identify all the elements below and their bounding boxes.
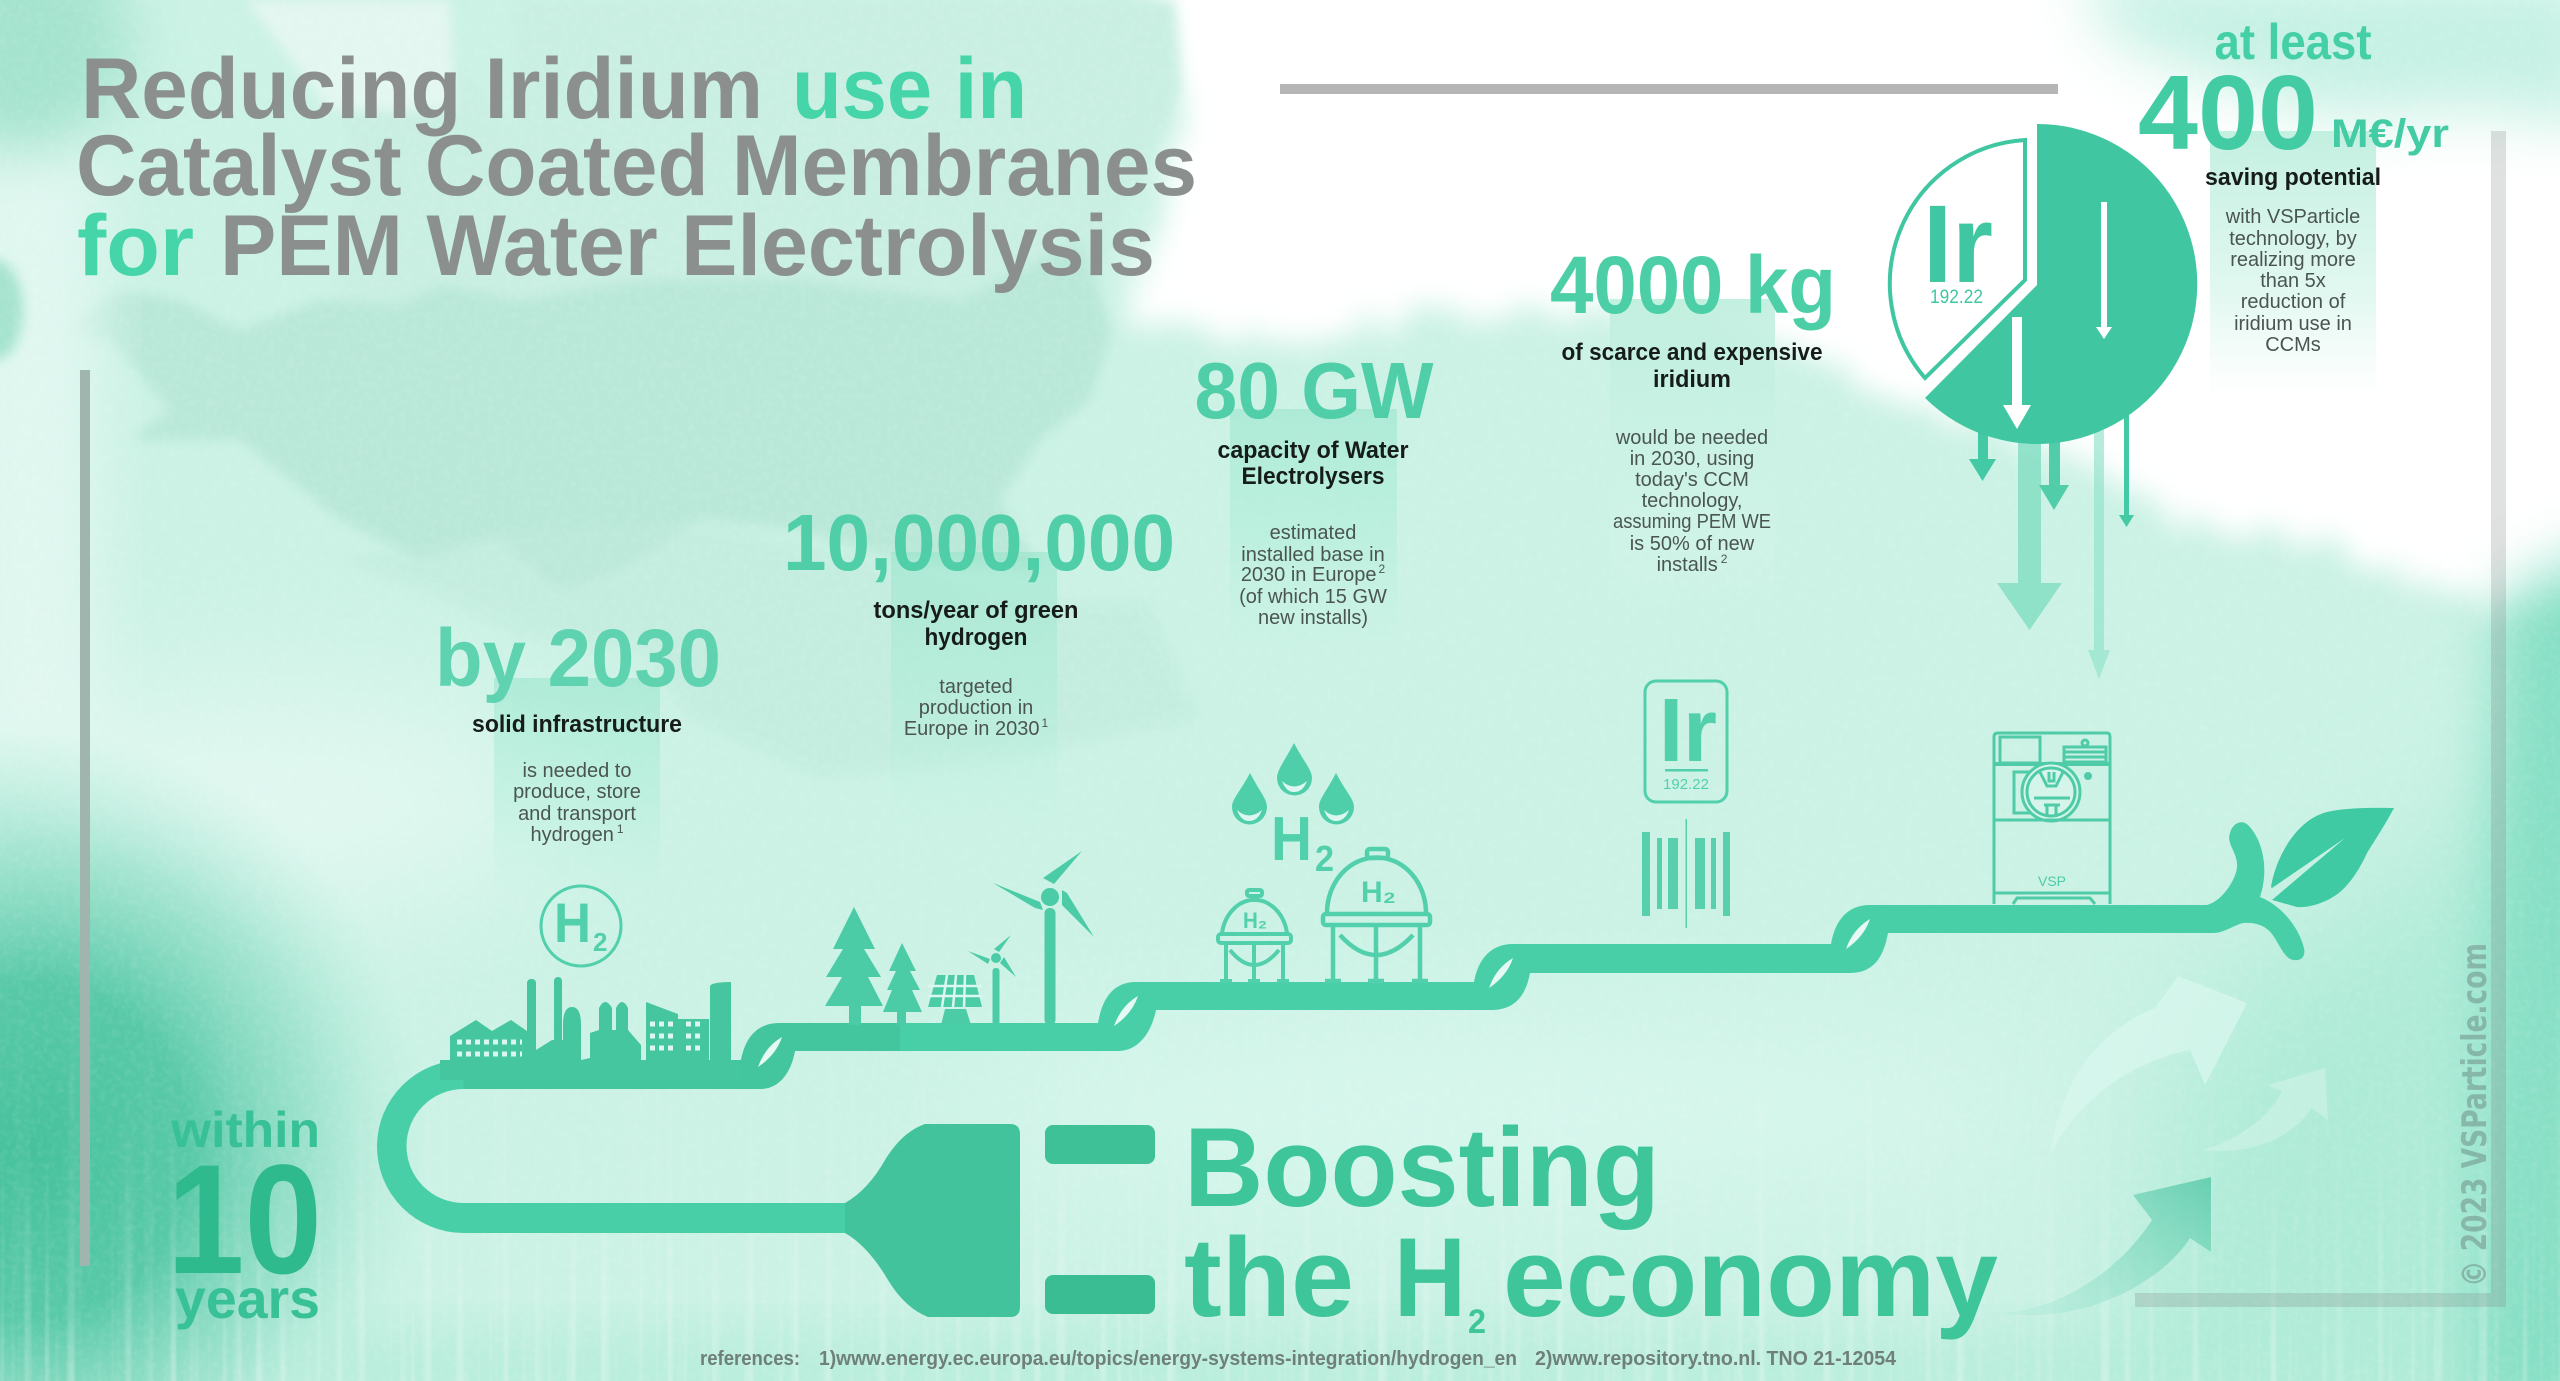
arrow: medium green — [2039, 430, 2069, 510]
heading: Boosting the H2 economy — [1184, 1105, 1998, 1341]
title: use in — [792, 41, 1027, 137]
wind turbine large — [993, 851, 1094, 1025]
stat: 4000 kg: 4000 kg — [1550, 240, 1836, 331]
background: vertical tree trunk streaks — [0, 1098, 2560, 1381]
icon: VSP machine — [1994, 733, 2110, 904]
body text: VSParticle saving: CCMs — [2265, 334, 2321, 356]
body text: installed base: installed base in — [1241, 544, 1385, 566]
body text: targeted production: production in — [919, 697, 1033, 719]
arrow: thin faded — [2088, 430, 2110, 679]
icon: small hydrogen tank: H₂ — [1243, 908, 1267, 933]
body text: installed base: 2 — [1378, 562, 1385, 576]
body text: installed base: new installs) — [1258, 607, 1368, 629]
body text: iridium need: is 50% of new — [1630, 533, 1755, 555]
icon: VSP machine: VSP — [2038, 873, 2066, 889]
body text: VSParticle saving — [2225, 206, 2360, 356]
background: Europe map body — [60, 240, 1112, 590]
text: within 10 years: within — [170, 1102, 320, 1158]
icon: iridium element card: Ir — [1659, 681, 1717, 781]
background: left mid blob — [0, 260, 23, 360]
arrow: faint upward large — [2051, 976, 2247, 1153]
subheading: tons per year — [874, 597, 1078, 651]
body text: VSParticle saving: with VSParticle — [2225, 206, 2360, 228]
pie: Ir symbol: Ir — [1923, 183, 1993, 306]
body text: VSParticle saving: iridium use in — [2234, 313, 2352, 335]
solar panel — [928, 975, 982, 1025]
body text: iridium need: in 2030, using — [1630, 448, 1754, 470]
body text: by 2030: produce, store — [513, 781, 641, 803]
H2 pipeline and plug — [377, 808, 2394, 1317]
frame bar: left — [80, 370, 90, 1266]
subheading: capacity — [1218, 437, 1408, 490]
pie chart: iridium reduction — [1890, 124, 2197, 444]
background: white sky upper right — [1120, 0, 2560, 610]
text: within 10 years — [167, 1102, 322, 1330]
body text: targeted production: Europe in 2030 — [904, 718, 1039, 740]
subheading: scarce iridium: of scarce and expensive — [1562, 339, 1822, 366]
pie: atomic mass: 192.22 — [1930, 287, 1983, 308]
leaf — [2271, 808, 2394, 907]
arrow: faint upward small — [2202, 1068, 2328, 1151]
title: Reducing Iridium — [81, 41, 763, 137]
arrow: large faded — [1997, 430, 2062, 630]
pie: filled saved share — [1925, 124, 2197, 444]
background: bright centre below the pipeline — [940, 1030, 2060, 1190]
heading: Boosting the H2 economy: Boosting — [1184, 1105, 1660, 1230]
icon: iridium element card: 192.22 — [1663, 776, 1709, 793]
subheading: tons per year: hydrogen — [924, 624, 1028, 651]
body text: VSParticle saving: reduction of — [2241, 291, 2346, 313]
background: pale lower-mid haze — [0, 690, 560, 910]
title: for — [77, 198, 194, 294]
wind turbine small — [968, 935, 1016, 1025]
heading: Boosting the H2 economy: the — [1184, 1215, 1354, 1340]
panel: 80 GW — [1194, 346, 1434, 654]
background: top-left wash — [0, 0, 130, 150]
arrow: short green — [1969, 430, 1996, 481]
plug body — [845, 1124, 1020, 1317]
subheading: capacity: Electrolysers — [1242, 463, 1384, 490]
stat: at least: at least — [2214, 14, 2372, 70]
body text: installed base — [1239, 522, 1387, 629]
city: windows — [457, 1024, 704, 1054]
background: Scandinavia wash — [245, 0, 1180, 320]
title: PEM Water Electrolysis — [220, 198, 1155, 294]
title — [76, 41, 1197, 294]
icon: large hydrogen tank: H₂ — [1361, 876, 1396, 909]
title: Catalyst Coated Membranes — [76, 118, 1197, 214]
body text: VSParticle saving: realizing more — [2230, 249, 2356, 271]
icon: big H2 label: 2 — [1315, 838, 1334, 879]
body text: iridium need: would be needed — [1615, 427, 1768, 449]
background: light wash top strip — [245, 0, 455, 110]
arrow: white long — [2096, 202, 2112, 339]
plug prong: bottom — [1045, 1275, 1155, 1314]
body text: targeted production: 1 — [1041, 716, 1048, 730]
stat: 400: 400 — [2138, 54, 2318, 172]
stat: by 2030: by 2030 — [435, 613, 721, 704]
icon: H2 circle — [541, 886, 621, 966]
heading: Boosting the H2 economy: economy — [1503, 1215, 1998, 1340]
body text: by 2030: 1 — [617, 822, 624, 836]
plug prong: top — [1045, 1125, 1155, 1164]
background: far right foliage strip — [2470, 540, 2560, 1381]
body text: by 2030: hydrogen — [530, 824, 614, 846]
pipeline: darker first tier — [464, 1023, 900, 1089]
background: lower map Balkans — [340, 520, 1200, 780]
background: dark forest lower left — [0, 720, 440, 1381]
body text: iridium need: technology, — [1642, 490, 1742, 512]
icon: city skyline and industry — [440, 977, 740, 1080]
body text: iridium need: today's CCM — [1635, 469, 1749, 491]
stat: 80 GW: 80 GW — [1194, 346, 1434, 435]
body text: installed base: estimated — [1270, 522, 1356, 544]
arrow: thin green — [2119, 410, 2134, 527]
subheading: capacity: capacity of Water — [1218, 437, 1408, 464]
references: 1)www.energy.ec.europa.eu/topics/energy-systems-integration/hydrogen_en — [819, 1348, 1517, 1370]
subheading: saving potential: saving potential — [2205, 164, 2381, 191]
frame bar: bottom — [2135, 1293, 2491, 1307]
text: within 10 years: 10 — [167, 1133, 322, 1307]
body text: iridium need: assuming PEM WE — [1613, 511, 1771, 533]
watermark: copyright: © 2023 VSParticle.com — [2455, 943, 2495, 1287]
icon: spectrum barcode — [1642, 819, 1730, 928]
subheading: tons per year: tons/year of green — [874, 597, 1078, 624]
body text: targeted production — [904, 676, 1048, 740]
heading: Boosting the H2 economy: H — [1394, 1215, 1466, 1340]
frame bar: top — [1280, 84, 2058, 94]
subheading: solid infrastructure: solid infrastructure — [472, 711, 682, 738]
body text: VSParticle saving: than 5x — [2260, 270, 2326, 292]
pipeline body with twists and root — [377, 822, 2304, 1233]
panel: by 2030 — [435, 613, 721, 900]
arrows below the pie — [1969, 410, 2134, 679]
pie: outlined remaining share — [1890, 140, 2025, 378]
stat: 10,000,000: 10,000,000 — [783, 498, 1175, 587]
arrow: green upward — [2002, 1177, 2211, 1315]
background: right lower darker — [2100, 750, 2560, 1381]
references: references: — [700, 1348, 800, 1370]
heading: Boosting the H2 economy: 2 — [1468, 1303, 1486, 1341]
icon: iridium element card — [1645, 681, 1727, 802]
body text: installed base: (of which 15 GW — [1239, 586, 1387, 608]
body text: iridium need: 2 — [1721, 552, 1728, 566]
body text: iridium need: installs — [1657, 554, 1718, 576]
frame bar: right — [2491, 131, 2506, 1307]
icon: big H2 label — [1271, 805, 1334, 879]
icon: big H2 label: H — [1271, 805, 1312, 874]
body text: iridium need — [1613, 427, 1771, 576]
body text: installed base: 2030 in Europe — [1241, 564, 1376, 586]
panel: saving potential — [2138, 14, 2449, 401]
icon: forest and renewable energy — [825, 851, 1094, 1025]
body text: by 2030: is needed to — [523, 760, 631, 782]
subheading: scarce iridium: iridium — [1653, 366, 1731, 393]
arrow: white thick — [2003, 317, 2031, 429]
panel: 10,000,000 tons — [783, 498, 1175, 832]
background: left pale column — [0, 120, 100, 760]
body text: by 2030 — [513, 760, 641, 846]
tree small — [883, 943, 922, 1025]
subheading: scarce iridium — [1562, 339, 1822, 393]
background: top-right cloud — [2080, 0, 2560, 130]
icon: H2 circle: H — [554, 891, 591, 954]
tree large — [825, 907, 883, 1025]
background: bottom band — [300, 1330, 2500, 1381]
icon: H2 circle: 2 — [593, 927, 607, 957]
icon: large hydrogen tank — [1323, 849, 1430, 981]
body text: targeted production: targeted — [939, 676, 1013, 698]
pipeline: twist slits — [758, 919, 1870, 1067]
references: 2)www.repository.tno.nl. TNO 21-12054 — [1535, 1348, 1897, 1370]
icon: small hydrogen tank — [1218, 890, 1291, 981]
body text: VSParticle saving: technology, by — [2229, 228, 2357, 250]
text: within 10 years: years — [175, 1267, 320, 1330]
panel: 4000 kg — [1550, 240, 1836, 611]
stat: unit: M€/yr — [2331, 112, 2449, 156]
references — [700, 1348, 1897, 1370]
icon: water drops — [1232, 743, 1354, 824]
body text: by 2030: and transport — [518, 803, 636, 825]
